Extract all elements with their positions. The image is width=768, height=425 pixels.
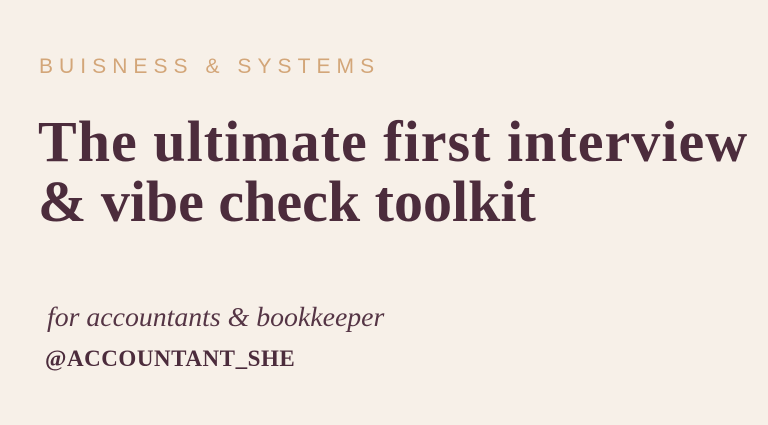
title: The ultimate first interview (38, 109, 748, 174)
title (38, 109, 748, 234)
social handle: @ACCOUNTANT_SHE (45, 346, 295, 371)
title: & vibe check toolkit (38, 169, 536, 234)
subtitle: for accountants & bookkeeper (47, 302, 384, 333)
eyebrow: category label: BUISNESS & SYSTEMS (39, 55, 380, 78)
